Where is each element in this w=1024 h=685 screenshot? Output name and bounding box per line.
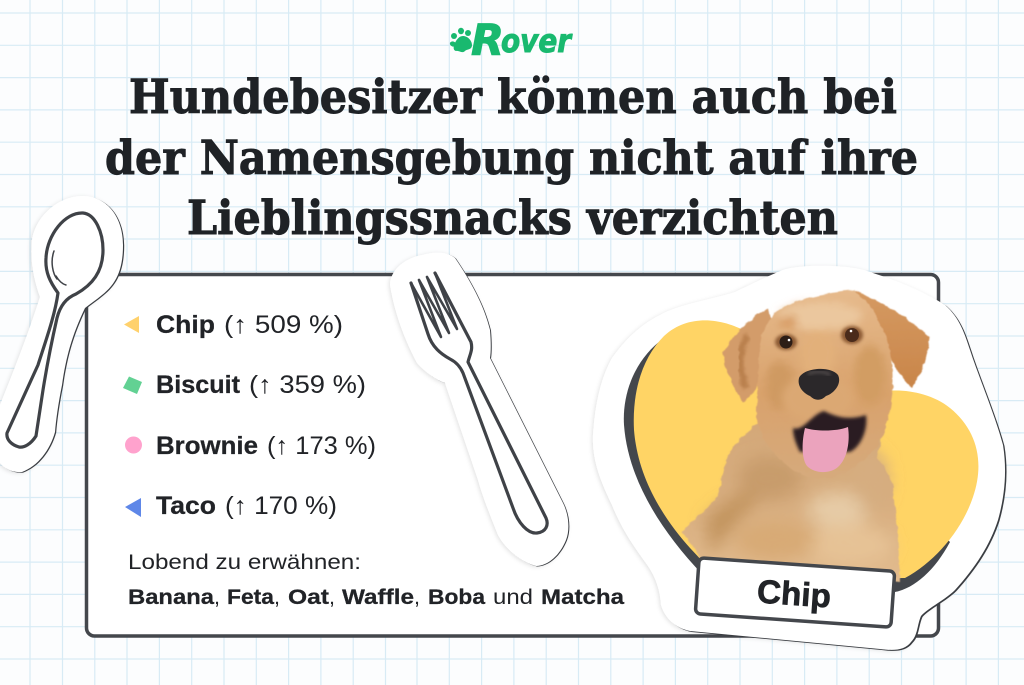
item: Taco: (↑ 170 %): [225, 492, 337, 520]
heart: [634, 320, 978, 580]
heart shadow: [624, 338, 950, 592]
left ear: [723, 309, 774, 402]
icon: paw: [449, 28, 472, 52]
honorable mentions: Waffle: [342, 585, 414, 609]
eyes: [775, 334, 797, 350]
dog photo illustration: [682, 290, 930, 582]
logo: Rover: [449, 16, 573, 66]
item: Brownie: (↑ 173 %): [267, 432, 376, 460]
honorable mentions: ,: [274, 585, 280, 609]
fork outline: [411, 273, 547, 533]
item: Chip: Chip: [156, 311, 215, 339]
name label: [695, 558, 895, 627]
honorable mentions: ,: [329, 585, 335, 609]
honorable mentions: Oat: [288, 585, 329, 609]
item: Brownie: Brownie: [156, 432, 258, 460]
item: Brownie: [125, 432, 376, 460]
icon: spoon sticker: [0, 196, 124, 473]
dog sticker: [593, 266, 1007, 651]
sticker base: [594, 267, 1007, 651]
item: Chip: (↑ 509 %): [224, 311, 343, 339]
dog face details: [775, 326, 866, 472]
item: Biscuit: Biscuit: [156, 371, 241, 399]
honorable mentions: und: [493, 585, 533, 609]
title: [105, 70, 918, 246]
honorable mentions: [128, 550, 625, 609]
head: [756, 290, 893, 479]
item: Taco: Taco: [156, 492, 216, 520]
icon: fork sticker: [390, 253, 569, 566]
item: Biscuit: [123, 371, 366, 399]
body: [682, 393, 900, 582]
tongue: [803, 427, 849, 472]
item: Taco: [125, 492, 337, 520]
wordmark: R: [471, 16, 504, 66]
name label: Chip: [756, 572, 832, 615]
wordmark: over: [501, 22, 573, 60]
mouth: [793, 411, 866, 452]
wordmark: [471, 16, 573, 66]
honorable mentions: Banana: [128, 585, 215, 609]
muzzle: [782, 374, 854, 422]
honorable mentions: ,: [214, 585, 220, 609]
panel: list card: [86, 274, 938, 636]
title: der Namensgebung nicht auf ihre: [105, 131, 918, 186]
honorable mentions: Matcha: [541, 585, 625, 609]
item: Biscuit: (↑ 359 %): [249, 371, 366, 399]
title: Lieblingssnacks verzichten: [187, 191, 838, 246]
nose: [799, 369, 839, 400]
honorable mentions: Feta: [227, 585, 275, 609]
honorable mentions: Lobend zu erwähnen:: [128, 550, 361, 574]
honorable mentions: Boba: [428, 585, 486, 609]
title: Hundebesitzer können auch bei: [129, 70, 897, 125]
item: Chip: [124, 311, 343, 339]
honorable mentions: ,: [414, 585, 420, 609]
legend list: [123, 311, 376, 520]
right ear: [853, 290, 930, 388]
